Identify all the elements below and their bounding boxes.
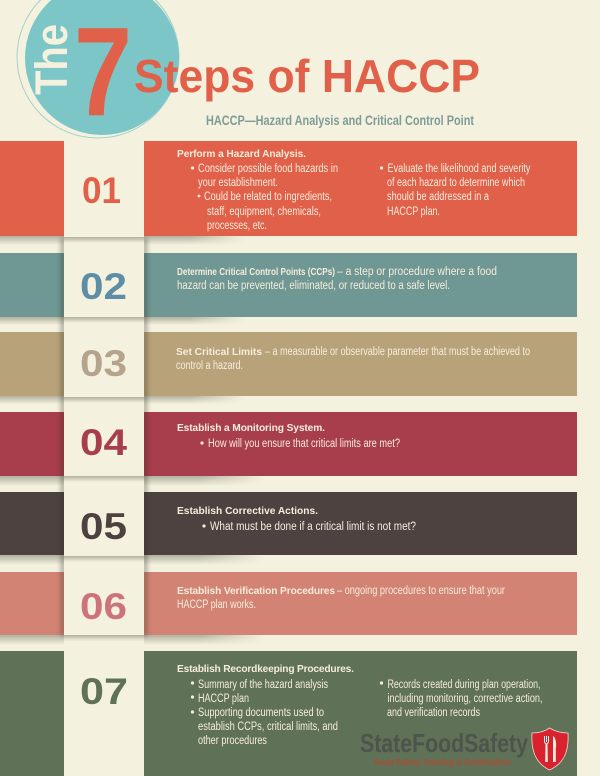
- step 2 text: hazard can be prevented, eliminated, or reduced to a safe level.: [177, 280, 450, 292]
- step 6 text: [177, 585, 505, 611]
- step number 06: 06: [80, 585, 127, 627]
- step 1 text: Perform a Hazard Analysis.: [177, 149, 306, 160]
- step 4 text: [177, 423, 400, 450]
- step number 02: 02: [80, 265, 127, 307]
- step 1 text: HACCP plan.: [387, 206, 440, 218]
- number column: [64, 134, 144, 776]
- panel: step 4 band: [0, 412, 577, 476]
- logo tagline: Food Safety Training & Certification: [374, 757, 511, 767]
- step 6 text: Establish Verification Procedures: [177, 586, 335, 597]
- step 1 text: Could be related to ingredients,: [204, 191, 332, 203]
- icon: red shield with fork and knife: [532, 728, 568, 770]
- title: Steps of HACCP: Steps of HACCP: [134, 50, 480, 102]
- panel: step 5 band: [0, 492, 577, 555]
- title numeral: 7: 7: [74, 1, 132, 142]
- step number 05: 05: [80, 505, 127, 547]
- step 3 text: Set Critical Limits: [176, 347, 262, 358]
- column shadows: [61, 238, 147, 636]
- panel: step 6 band: [0, 572, 577, 635]
- step 7 text: Records created during plan operation,: [388, 679, 540, 691]
- step 6 text: HACCP plan works.: [177, 599, 256, 611]
- title word: The: The: [26, 24, 77, 95]
- step 7 text: including monitoring, corrective action,: [388, 693, 542, 705]
- step 1 text: Consider possible food hazards in: [198, 163, 338, 175]
- panel: step 1 band: [0, 141, 577, 236]
- step 1 text: staff, equipment, chemicals,: [207, 206, 321, 218]
- step 7 text: other procedures: [198, 735, 267, 747]
- step 2 text: – a step or procedure where a food: [337, 266, 497, 278]
- logo wordmark: StateFoodSafety: StateFoodSafety: [360, 728, 528, 758]
- step 4 text: How will you ensure that critical limits are met?: [208, 438, 400, 450]
- step number 07: 07: [80, 670, 128, 712]
- band shadows: [0, 236, 264, 645]
- step 1 text: should be addressed in a: [387, 191, 489, 203]
- step 1 text: your establishment.: [198, 177, 278, 189]
- panel: step 7 band: [0, 651, 577, 776]
- step 7 text: establish CCPs, critical limits, and: [198, 721, 338, 733]
- step 2 text: Determine Critical Control Points (CCPs): [177, 267, 335, 278]
- shadow fades: [190, 236, 265, 646]
- step 5 text: What must be done if a critical limit is not met?: [210, 521, 416, 533]
- step 6 text: – ongoing procedures to ensure that your: [337, 585, 505, 597]
- step 3 text: control a hazard.: [176, 360, 243, 372]
- step 5 text: Establish Corrective Actions.: [177, 506, 318, 517]
- step 1 text: of each hazard to determine which: [387, 177, 525, 189]
- panel: step 2 band: [0, 253, 577, 317]
- step 7 text: Summary of the hazard analysis: [198, 679, 328, 691]
- step 7 text: Establish Recordkeeping Procedures.: [177, 664, 354, 675]
- panel: step 3 band: [0, 332, 577, 396]
- step number 04: 04: [80, 421, 127, 463]
- step 1 text: processes, etc.: [207, 220, 267, 232]
- step 1 text: Evaluate the likelihood and severity: [388, 163, 531, 175]
- title badge: teal circle: [17, 0, 179, 138]
- step 7 text: and verification records: [387, 707, 480, 719]
- step number 03: 03: [80, 342, 127, 384]
- step number 01: 01: [82, 169, 121, 211]
- step 7 text: HACCP plan: [198, 693, 249, 705]
- step 3 text: – a measurable or observable parameter that must be achieved to: [265, 346, 530, 358]
- subtitle: HACCP—Hazard Analysis and Critical Control Point: [206, 113, 474, 128]
- step 1 text: [177, 149, 531, 232]
- step 5 text: [177, 506, 416, 533]
- step 7 text: Supporting documents used to: [198, 707, 324, 719]
- step 7 text: [177, 664, 542, 747]
- step 2 text: [177, 266, 497, 292]
- step 4 text: Establish a Monitoring System.: [177, 423, 325, 434]
- step 3 text: [176, 346, 530, 372]
